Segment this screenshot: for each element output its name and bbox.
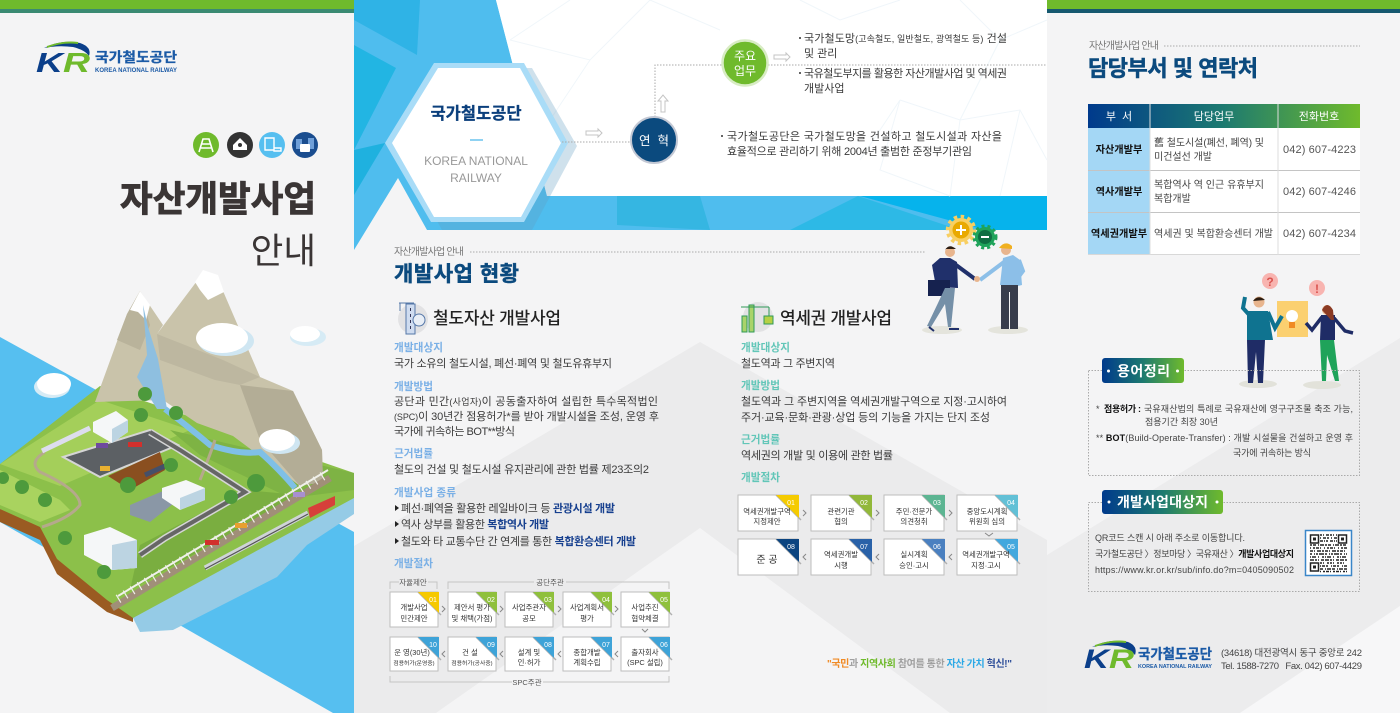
step 03 [505,592,556,627]
step 04: 사업계획서 [570,603,604,612]
clouds [34,323,326,454]
illustration: railway island [0,270,354,632]
text block: station area development: 개발대상지 [741,341,790,354]
text block: railway asset development: 국가에 귀속하는 BOT**방식 [394,424,515,438]
step 02: 및 채택(가점) [452,614,492,623]
text block: railway asset development: 철도와 타 교통수단 간 연계를 통한 복합환승센터 개발 [401,534,636,548]
step 07: 종합개발 [573,648,601,657]
panel: contact background [1047,0,1400,713]
step 10: 운 영(30년) [394,648,430,657]
icon: station area crane [741,302,773,332]
label: glossary [1102,358,1184,383]
table: contacts: 舊 철도시설(폐선, 폐역) 및 [1154,136,1264,149]
step 01 [390,592,441,627]
step 07 [811,539,874,575]
text: address: (34618) 대전광역시 동구 중앙로 242 [1221,647,1362,659]
buildings [93,411,128,443]
step 02 [448,592,499,627]
hexagon badge: 국가철도공단 [430,104,522,123]
table: contacts: 부 서 [1106,110,1132,123]
text block: station area development: 개발절차 [741,471,780,484]
illustration: handshake [922,216,1028,334]
hexagon badge: KOREA NATIONAL [424,154,528,168]
step 04: 04 [1007,500,1015,507]
text block: station area development: 철도역과 그 주변지역을 역세권개발구역으로 지정·고시하여 [741,394,1007,408]
text block: station area development: 개발방법 [741,379,780,392]
step 06: 실시계획 [900,550,928,559]
step 03: 03 [544,597,552,604]
step 06 [884,539,947,575]
step 09 [448,637,499,671]
step 09: 09 [487,642,495,649]
step 06 [621,637,672,671]
text: main duties: 국유철도부지를 활용한 자산개발사업 및 역세권 [804,66,1007,80]
chevrons [803,510,993,560]
step 08 [505,637,556,671]
step 07: 07 [860,544,868,551]
step 05: 05 [1007,544,1015,551]
label: project sites [1102,490,1223,514]
step 08: 08 [544,642,552,649]
step 01: 01 [429,597,437,604]
text block: railway asset development: 개발방법 [394,380,433,393]
arrow: upward [658,95,668,112]
step 03: 공모 [522,614,536,623]
logo: footer [1084,640,1212,674]
text block: railway asset development: 역사 상부를 활용한 복합역사 개발 [401,517,549,531]
box: project sites [1088,490,1360,592]
box: project sites: QR코드 스캔 시 아래 주소로 이동합니다. [1095,533,1245,543]
step 07: 07 [602,642,610,649]
box: project sites: https://www.kr.or.kr/sub/info.do?m=0405090502 [1095,565,1294,575]
box: glossary: 점용허가 : [1104,403,1141,414]
text: address: Tel. 1588-7270 Fax. 042) 607-4429 [1221,661,1362,672]
gears [948,216,996,248]
table: contacts: 복합역사 역 인근 유휴부지 [1154,179,1264,191]
arrow: duties [774,53,790,61]
step 03: 사업주관자 [512,603,546,612]
title: cover: 자산개발사업 [120,179,316,219]
heading: development status: 개발사업 현황 [394,263,519,286]
table: contacts: 담당업무 [1194,110,1234,123]
text block: railway asset development: 국가 소유의 철도시설, 폐선·폐역 및 철도유휴부지 [394,357,612,370]
text block: station area development: 근거법률 [741,433,780,446]
title: cover [120,179,316,271]
heading: station area: 역세권 개발사업 [780,309,892,328]
circle: main duties: 업무 [734,64,756,78]
step 03: 03 [933,500,941,507]
table: contacts: 미건설선 개발 [1154,151,1212,163]
step 03: 의견청취 [900,517,928,526]
step 01: 개발사업 [400,603,428,612]
table: contacts: 복합개발 [1154,193,1191,205]
circle: history: 연 혁 [639,134,669,148]
table: contacts: 042) 607-4234 [1283,228,1356,240]
flow chart: station area procedure [738,495,1020,575]
step 09: 건 설 [462,648,478,657]
step 01: 지정제안 [753,517,781,526]
box: project sites: 국가철도공단 〉정보마당 〉국유재산 〉개발사업대상지 [1095,548,1294,559]
heading: development status: 자산개발사업 안내 [394,245,464,258]
logo: footer: 국가철도공단 [1138,646,1212,662]
bracket labels: 공단주관 [536,577,564,587]
text block: station area development: 철도역과 그 주변지역 [741,357,835,370]
circle: main duties [722,40,768,86]
icons: four circles [193,132,318,158]
step 06: 06 [933,544,941,551]
step 04: 04 [602,597,610,604]
step 10: 점용허가(운영중) [393,659,435,667]
step 01 [738,495,801,531]
step 06: 승인·고시 [899,561,929,570]
text: main duties: 개발사업 [804,82,844,95]
table: contacts: 전화번호 [1299,110,1339,123]
step 05: 협약체결 [631,614,659,623]
step 06: 06 [660,642,668,649]
step 05 [957,539,1020,575]
step 07: 역세권개발 [824,550,858,559]
logo: cover: KOREA NATIONAL RAILWAY [95,68,177,74]
heading: development status [394,245,925,286]
step 08: 인·허가 [518,658,541,667]
step 08: 08 [787,544,795,551]
step 05: 05 [660,597,668,604]
text: address [1221,647,1362,672]
step 07 [563,637,614,671]
arrow: hexagon to history [586,129,602,137]
icon: railway asset [398,303,428,334]
text block: railway asset development: 개발절차 [394,557,433,570]
step 05: 사업추진 [631,603,659,612]
step 08: 준 공 [756,554,778,566]
circle: history [631,117,677,163]
heading: contacts [1088,39,1360,81]
step 08 [738,539,801,575]
text block: railway asset development: 개발사업 종류 [394,486,456,499]
text block: railway asset development [394,341,659,570]
table: contacts: 042) 607-4246 [1283,186,1356,198]
logo: footer: KR [1084,644,1135,674]
panel: center background [354,0,1047,713]
label: project sites: 개발사업대상지 [1117,494,1208,510]
text block: railway asset development: 철도의 건설 및 철도시설 유지관리에 관한 법률 제23조의2 [394,463,649,476]
step 02: 협의 [834,517,848,526]
table: contacts: 역세권 및 복합환승센터 개발 [1154,228,1273,240]
trees [0,387,265,579]
step 04 [563,592,614,627]
step 09: 점용허가(공사중) [451,659,493,667]
diagram: connectors [562,65,1047,142]
box: glossary: 점용기간 최장 30년 [1145,416,1218,427]
step 07: 시행 [834,561,848,570]
step 02: 02 [860,500,868,507]
hexagon badge [385,63,577,230]
tracks and roads [35,452,80,527]
box: glossary [1088,358,1360,476]
step 05: 지정·고시 [971,561,1001,570]
circle: main duties: 주요 [734,49,756,63]
text: history: 효율적으로 관리하기 위해 2004년 출범한 준정부기관임 [727,144,972,158]
step 10 [390,637,441,671]
table: contacts [1088,104,1360,255]
step 04: 위원회 심의 [969,517,1005,526]
step 01: 01 [787,500,795,507]
hexagon badge: RAILWAY [450,171,502,185]
text: main duties: 및 관리 [804,47,837,60]
logo: cover: 국가철도공단 [95,50,178,65]
step 07: 계획수립 [573,658,601,667]
box: glossary: * [1096,404,1100,414]
heading: contacts: 자산개발사업 안내 [1089,39,1159,52]
heading: railway asset: 철도자산 개발사업 [433,309,561,328]
step 03: 주민·전문가 [896,507,932,516]
vehicles [96,443,108,448]
table: contacts: 역사개발부 [1096,185,1142,198]
bracket labels [390,577,669,687]
heading: contacts: 담당부서 및 연락처 [1088,56,1258,81]
text block: railway asset development: 근거법률 [394,447,433,460]
QR code [1306,530,1352,576]
step 03 [884,495,947,531]
text block: station area development: 주거·교육·문화·관광·상업 등의 기능을 가지는 단지 조성 [741,411,990,424]
step 02: 관련기관 [827,507,855,516]
text block: station area development: 역세권의 개발 및 이용에 관한 법률 [741,449,893,462]
chevrons [442,606,648,657]
step 05 [621,592,672,627]
illustration: two people with idea: ! [1315,282,1319,296]
text: history: 국가철도공단은 국가철도망을 건설하고 철도시설과 자산을 [727,129,1002,143]
box: glossary: ** BOT(Build-Operate-Transfer) : 개발 시설물을 건설하고 운영 후 [1096,433,1353,443]
step 04: 평가 [580,614,594,623]
step 02 [811,495,874,531]
box: glossary: 국유재산법의 특례로 국유재산에 영구구조물 축조 가능, [1144,404,1353,414]
bracket labels: SPC주관 [512,677,542,687]
step 02: 제안서 평가 [454,603,490,612]
table: contacts: 역세권개발부 [1091,227,1147,240]
flow chart: railway asset procedure [390,577,672,687]
step 01: 민간제안 [400,614,428,623]
step 01: 역세권개발구역 [743,507,791,516]
illustration: two people with idea: ? [1266,275,1274,289]
logo: footer: KOREA NATIONAL RAILWAY [1138,664,1212,670]
text: main duties: 국가철도망(고속철도, 일반철도, 광역철도 등) 건설 [804,32,1007,45]
logo: cover: KR [36,47,91,78]
text block: railway asset development: 폐선·폐역을 활용한 레일바이크 등 관광시설 개발 [401,501,615,515]
table: contacts: 042) 607-4223 [1283,144,1356,156]
illustration: two people with idea [1239,273,1353,389]
table: contacts: 자산개발부 [1096,143,1142,156]
title: cover: 안내 [251,231,316,271]
label: glossary: 용어정리 [1117,363,1170,379]
text: history [721,129,1002,158]
text block: railway asset development: (SPC)이 30년간 점용허가*를 받아 개발시설을 조성, 운영 후 [394,410,659,423]
bracket labels: 자율제안 [399,577,427,587]
step 08: 설계 및 [518,648,540,657]
step 10: 10 [429,642,437,649]
box: glossary: 국가에 귀속하는 방식 [1233,448,1311,458]
text block: station area development [741,341,1007,484]
text: main duties [799,32,1007,95]
step 02: 02 [487,597,495,604]
panel: cover [0,0,354,713]
text block: railway asset development: 공단과 민간(사업자)이 공동출자하여 설립한 특수목적법인 [394,394,658,408]
step 05: 역세권개발구역 [962,550,1010,559]
step 04 [957,495,1020,531]
step 06: (SPC 설립) [627,658,663,667]
logo: cover [36,42,178,78]
slogan: "국민과 지역사회 참여를 통한 자산 가치 혁신!" [827,657,1012,670]
text block: railway asset development: 개발대상지 [394,341,443,354]
step 06: 출자회사 [631,648,659,657]
step 04: 중앙도시계획 [967,507,1007,516]
